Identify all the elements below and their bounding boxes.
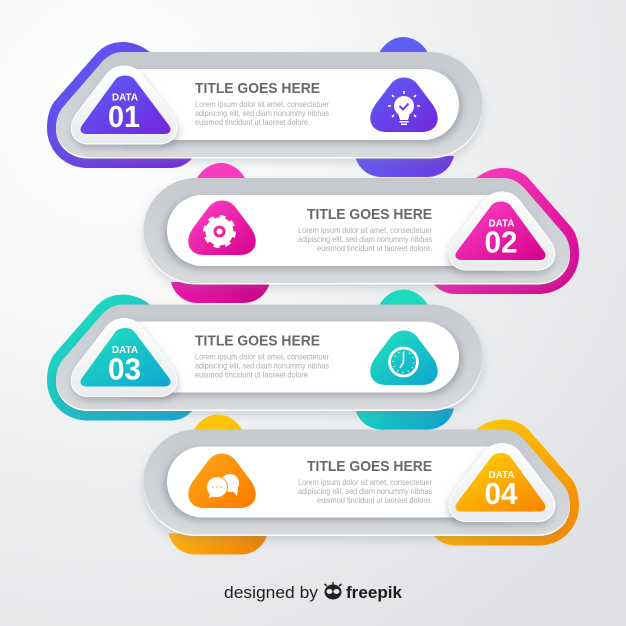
row 01 title: TITLE GOES HERE [195, 80, 320, 97]
row 02 body text: adipiscing elit, sed diam nonummy nibhas [298, 234, 432, 244]
row 02 grey pill [144, 178, 570, 284]
row 03 title: TITLE GOES HERE [195, 332, 320, 350]
row 02 data badge [449, 192, 555, 270]
row 03 data badge [71, 318, 177, 396]
panel: row 04 [144, 414, 579, 554]
row 03 body text: euismod tincidunt ut laoreet dolore. [195, 370, 310, 380]
row 01 body text: Lorem ipsum dolor sit amet, consectetuer [195, 99, 329, 109]
row 01 body text [195, 99, 329, 127]
row 02 title: TITLE GOES HERE [307, 206, 432, 223]
row 02 data badge: 02 [484, 224, 518, 260]
row 04 body text: Lorem ipsum dolor sit amet, consectetuer [298, 477, 432, 487]
row 02 body text: Lorem ipsum dolor sit amet, consectetuer [298, 225, 432, 235]
row 02 body text: euismod tincidunt ut laoreet dolore. [317, 243, 432, 253]
icon: freepik logo [324, 582, 342, 600]
row 04 body text [298, 477, 432, 505]
row 04 data badge: DATA [488, 470, 514, 481]
panel: row 03 [47, 290, 482, 430]
row 01 body text: euismod tincidunt ut laoreet dolore. [195, 117, 310, 127]
row 04 title: TITLE GOES HERE [307, 458, 432, 475]
panel: row 01 [47, 37, 482, 177]
row 03 data badge: DATA [112, 345, 138, 356]
row 02 body text [298, 225, 432, 253]
freepik wordmark: freepik [346, 583, 403, 602]
row 01 coloured backing [47, 37, 454, 177]
row 03 body text: Lorem ipsum dolor sit amet, consectetuer [195, 352, 329, 362]
panel: row 02 [144, 163, 579, 303]
row 04 coloured backing [168, 414, 579, 554]
icon: chat bubbles [188, 454, 256, 508]
row 04 grey pill [144, 430, 570, 536]
row 04 data badge: 04 [484, 476, 518, 511]
row 03 coloured backing [47, 290, 454, 430]
footer: designed by freepik [224, 582, 403, 602]
row 01 data badge [71, 66, 177, 144]
row 02 coloured backing [171, 163, 579, 303]
row 01 data badge: 01 [108, 99, 140, 134]
icon: clock [370, 330, 438, 385]
row 03 data badge: 03 [108, 352, 141, 386]
row 04 data badge [449, 444, 555, 522]
row 02 data badge: DATA [488, 218, 514, 230]
row 04 body text: euismod tincidunt ut laoreet dolore. [317, 495, 432, 505]
icon: light bulb with check [370, 78, 438, 132]
row 01 data badge: DATA [112, 92, 138, 104]
row 01 body text: adipiscing elit, sed diam nonummy nibhas [195, 108, 329, 118]
icon: gear [188, 200, 256, 255]
row 04 body text: adipiscing elit, sed diam nonummy nibhas [298, 486, 432, 496]
row 01 grey pill [56, 52, 482, 158]
footer credit text: designed by [224, 584, 319, 602]
row 03 grey pill [56, 304, 482, 411]
row 03 body text [195, 352, 329, 380]
row 03 body text: adipiscing elit, sed diam nonummy nibhas [195, 360, 329, 370]
